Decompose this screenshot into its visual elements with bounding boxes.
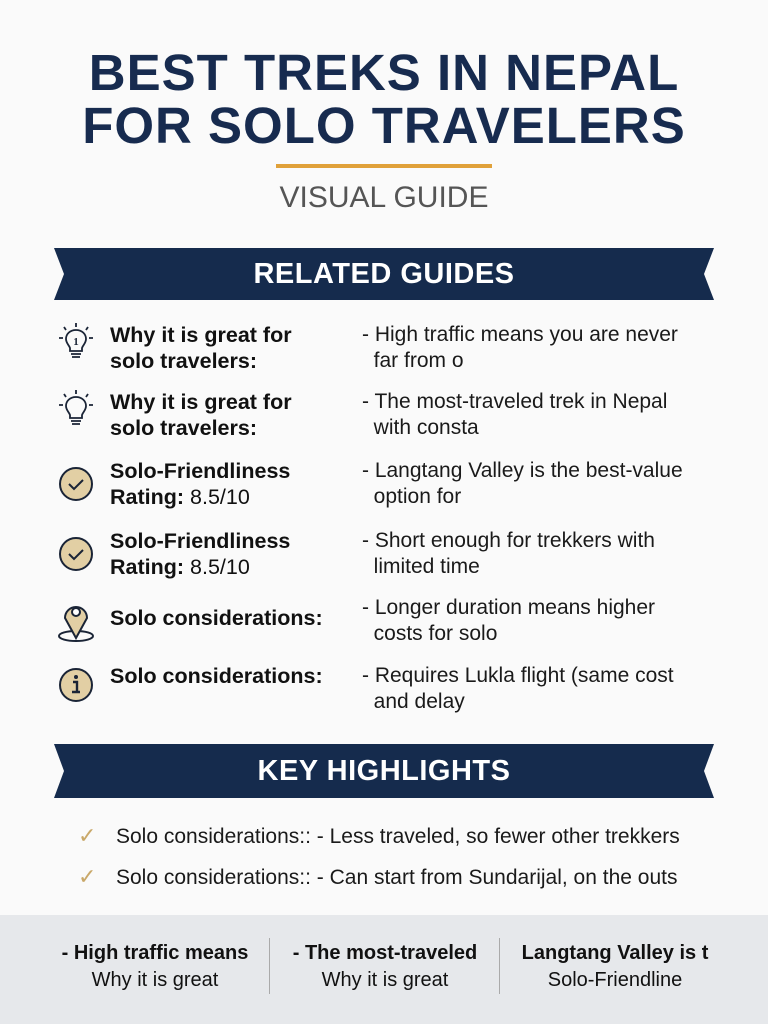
subtitle: VISUAL GUIDE [280,181,488,214]
text: row 6 label: Solo considerations: [110,664,323,688]
text: row 6 detail: and delay [374,690,465,713]
banner: related guides [54,248,714,300]
text: row 3 label [110,459,290,509]
text: row 1 detail [362,323,678,372]
text: row 6 detail: - Requires Lukla flight (same cost [362,664,674,687]
text: row 2 label: solo travelers: [110,416,257,440]
text: row 2 detail: - The most-traveled trek in Nepal [362,390,667,413]
text: row 4 detail: - Short enough for trekkers with [362,529,655,552]
footer column 3 [522,942,708,991]
footer column 1 [62,942,248,991]
text: row 1 label: solo travelers: [110,349,257,373]
text: row 1 detail: - High traffic means you are never [362,323,678,346]
footer column 2: Why it is great [322,969,448,991]
banner: key highlights: KEY HIGHLIGHTS [258,755,510,787]
icon: info [59,668,93,702]
text: row 4 detail: limited time [374,555,480,578]
text: row 1 detail: far from o [374,349,464,372]
title [82,44,686,154]
text: row 5 detail [362,596,655,645]
icon: location pin [58,606,94,642]
footer column 3: Langtang Valley is t [522,942,708,964]
text: row 3 detail: option for [374,485,461,508]
footer column 2: - The most-traveled [293,942,477,964]
text: row 2 detail [362,390,667,439]
highlight 2: ✓ [78,864,96,889]
text: row 6 detail [362,664,674,713]
footer column 3: Solo-Friendline [548,969,682,991]
text: row 3 detail [362,459,683,508]
highlight 2: Solo considerations:: - Can start from Sundarijal, on the outs [116,866,677,889]
banner: related guides: RELATED GUIDES [253,258,515,290]
highlight 1: Solo considerations:: - Less traveled, so fewer other trekkers [116,825,680,848]
icon: lightbulb 1 [59,323,93,358]
text: row 3 label: Rating: 8.5/10 [110,485,250,509]
footer column 2 [293,942,477,991]
text: row 5 label: Solo considerations: [110,606,323,630]
icon: check 1 [59,467,93,501]
text: row 2 label [110,390,292,440]
icon: lightbulb 1: 1 [73,336,79,348]
icon: lightbulb 2 [59,390,93,425]
banner: key highlights [54,744,714,798]
footer column 1: - High traffic means [62,942,248,964]
text: row 5 detail: costs for solo [374,622,497,645]
highlight 1: ✓ [78,823,96,848]
text: row 3 label: Solo-Friendliness [110,459,290,483]
text: row 2 label: Why it is great for [110,390,292,414]
accent line [276,164,492,168]
text: row 4 label: Solo-Friendliness [110,529,290,553]
footer column 1: Why it is great [92,969,218,991]
text: row 3 detail: - Langtang Valley is the best-value [362,459,683,482]
text: row 4 label [110,529,290,579]
text: row 1 label: Why it is great for [110,323,292,347]
text: row 1 label [110,323,292,373]
icon: check 2 [59,537,93,571]
text: row 2 detail: with consta [374,416,479,439]
text: row 5 detail: - Longer duration means higher [362,596,655,619]
title: BEST TREKS IN NEPAL [89,44,679,101]
title: FOR SOLO TRAVELERS [82,97,686,154]
text: row 4 label: Rating: 8.5/10 [110,555,250,579]
text: row 4 detail [362,529,655,578]
footer panel [0,915,768,1024]
